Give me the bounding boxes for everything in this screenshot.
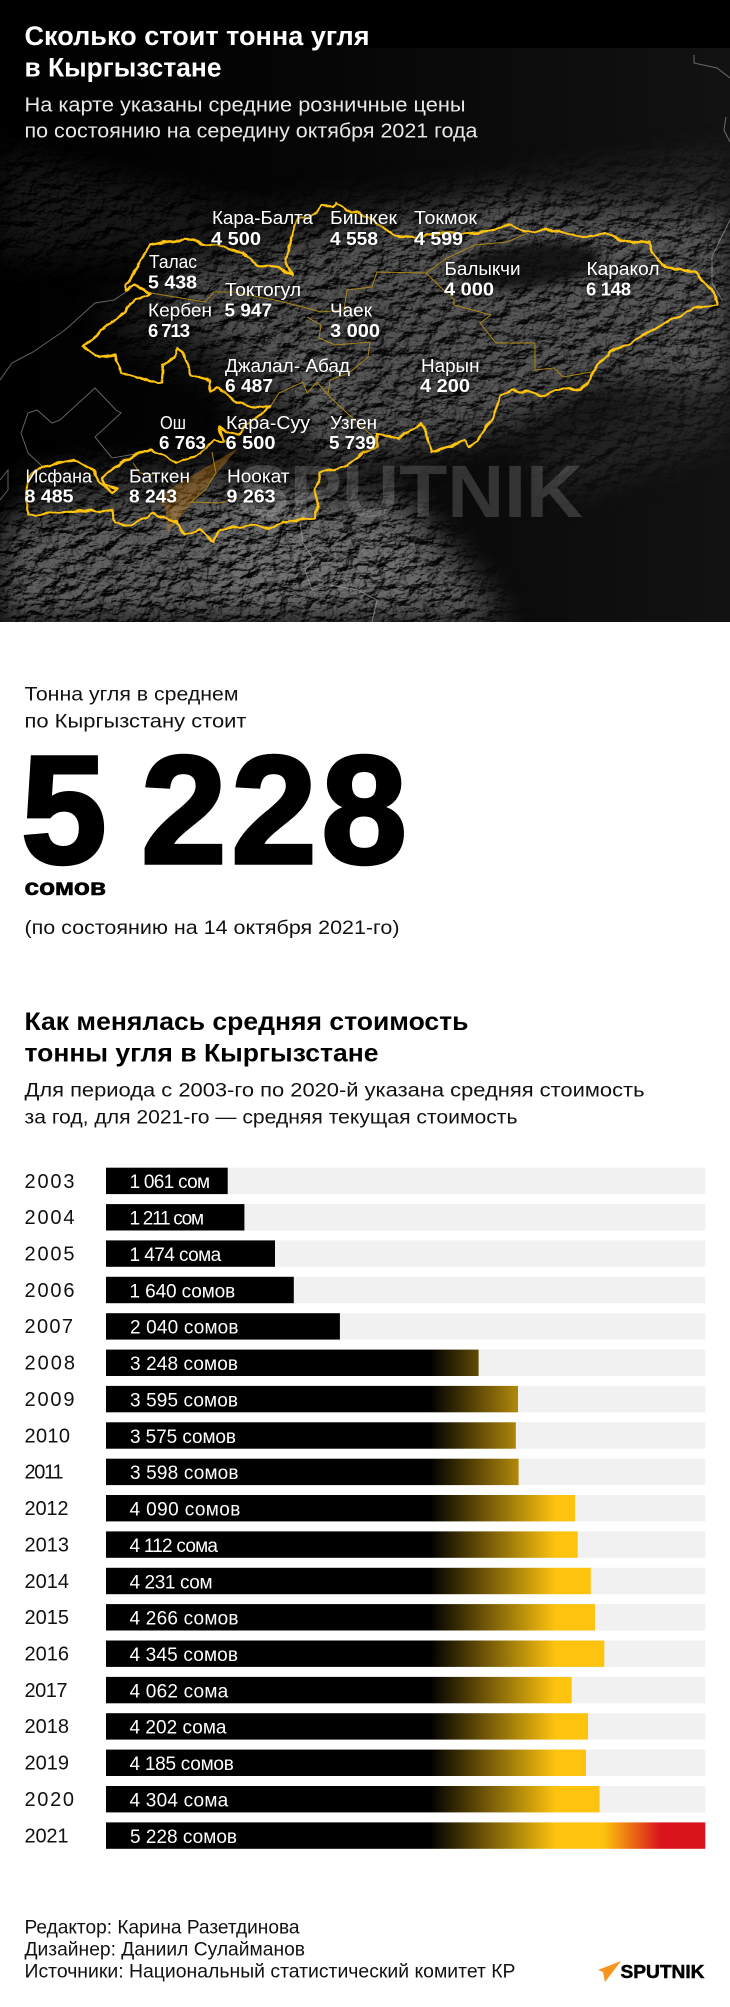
row 2010 [24,1422,705,1449]
row 2020: 2020 [24,1789,74,1811]
row 2005: 2005 [24,1243,74,1265]
label: Каракол: 6 148 [586,278,631,300]
row 2006: 2006 [24,1280,74,1302]
row 2007: 2 040 сомов [130,1318,238,1339]
label: Нарын: Нарын [421,355,480,376]
chart description: Для периода с 2003-го по 2020-й указана средняя стоимость [24,1080,644,1102]
label: Кара-Балта: 4 500 [211,228,261,249]
chart description [24,1080,644,1128]
label: Узген: 5 739 [329,432,376,453]
row 2016 [24,1640,705,1667]
label: Кербен: 6 713 [148,320,190,341]
text: national average intro: по Кыргызстану стоит [24,710,247,732]
label: Кара-Балта [211,207,314,249]
watermark: Sputnik orange logo [155,448,238,532]
bar chart: coal price by year [24,1168,705,1849]
label: Балыкчи: 4 000 [444,278,494,300]
row 2003: 2003 [24,1171,74,1193]
row 2019 [24,1750,705,1776]
row 2020: 4 304 сома [130,1790,229,1812]
label: Кара-Суу [226,412,311,453]
row 2009 [24,1386,705,1412]
label: Бишкек: 4 558 [330,228,378,249]
label: Джалал-Абад: Джалал- Абад [225,355,350,376]
row 2012: 4 090 сомов [130,1500,240,1520]
label: Токтогул [224,279,301,320]
label: Узген [329,412,377,453]
label: Бишкек [330,207,398,249]
row 2016: 4 345 сомов [130,1645,238,1666]
row 2014 [24,1568,705,1594]
subtitle: по состоянию на середину октября 2021 года [24,120,478,142]
label: Джалал-Абад: 6 487 [225,375,273,396]
watermark: SPUTNIK wordmark: SPUTNIK [237,450,583,533]
row 2011: 3 598 сомов [130,1463,238,1484]
row 2012: 2012 [24,1498,68,1520]
row 2015: 4 266 сомов [130,1609,238,1630]
credits: Дизайнер: Даниил Сулайманов [24,1938,305,1960]
row 2004 [24,1204,705,1230]
label: Талас: 5 438 [148,272,197,292]
subtitle [24,94,478,142]
label: Ноокат: Ноокат [227,466,290,486]
label: Ош: Ош [160,412,186,433]
label: Балыкчи: Балыкчи [444,258,520,279]
text: national average intro [24,684,247,732]
map labels: city prices [24,207,660,506]
row 2014: 4 231 сом [130,1572,212,1593]
label: Нарын: 4 200 [420,375,470,396]
credits: Источники: Национальный статистический комитет КР [24,1960,516,1982]
row 2004: 1 211 сом [130,1209,204,1230]
row 2010: 2010 [24,1425,70,1447]
label: Талас [148,251,197,292]
row 2011 [24,1459,705,1485]
label: Кара-Балта: Кара-Балта [212,207,314,228]
row 2017: 2017 [24,1680,68,1702]
oblast borders [133,233,591,503]
row 2015 [24,1604,705,1630]
title: в Кыргызстане [24,52,222,82]
label: Токмок: 4 599 [414,228,463,249]
row 2019: 4 185 сомов [130,1754,234,1775]
label: Токтогул: Токтогул [225,279,301,300]
row 2014: 2014 [24,1571,69,1593]
label: Чаек: Чаек [330,300,373,320]
row 2008: 2008 [24,1353,75,1375]
row 2020 [24,1786,705,1812]
row 2007: 2007 [24,1316,73,1338]
label: Чаек [330,300,380,341]
logo: Sputnik: SPUTNIK [620,1962,704,1982]
credits [24,1916,516,1982]
label: Чаек: 3 000 [330,320,380,341]
row 2010: 3 575 сомов [130,1427,236,1448]
chart heading [24,1008,468,1068]
label: Баткен: 8 243 [129,486,177,506]
label: Исфана [24,466,93,506]
row 2008: 3 248 сомов [130,1354,238,1375]
row 2012 [24,1495,705,1521]
row 2021 [24,1822,705,1849]
row 2006 [24,1277,705,1303]
row 2005 [24,1240,705,1267]
label: Исфана: Исфана [26,466,93,486]
credits: Редактор: Карина Разетдинова [24,1916,300,1938]
panel: relief map [0,0,730,622]
text: national average intro: Тонна угля в среднем [24,684,238,706]
row 2018: 2018 [24,1716,69,1738]
row 2003: 1 061 сом [130,1172,210,1193]
row 2009: 2009 [24,1389,74,1411]
label: Джалал-Абад [225,355,350,396]
row 2021: 5 228 сомов [130,1827,237,1848]
title [24,21,370,82]
row 2019: 2019 [24,1753,69,1775]
label: Ноокат [226,466,290,506]
label: Бишкек: Бишкек [330,207,398,228]
label: Кара-Суу: 6 500 [226,432,276,453]
label: Узген: Узген [330,412,377,433]
big number: 5 228: 5 [21,724,158,896]
row 2009: 3 595 сомов [130,1390,238,1411]
label: Исфана: 8 485 [24,486,74,506]
title: Сколько стоит тонна угля [24,21,370,51]
row 2005: 1 474 сома [130,1245,222,1266]
label: Нарын [420,355,480,396]
row 2021: 2021 [24,1825,68,1847]
row 2011: 2011 [24,1462,64,1484]
chart heading: Как менялась средняя стоимость [24,1008,468,1036]
chart description: за год, для 2021-го — средняя текущая стоимость [24,1106,518,1128]
label: Токмок: Токмок [414,207,478,228]
label: Токтогул: 5 947 [224,300,272,320]
Kyrgyzstan outline [26,202,717,542]
row 2013: 4 112 сома [130,1536,218,1557]
row 2007 [24,1313,705,1340]
row 2003 [24,1168,705,1194]
label: Каракол: Каракол [586,258,660,279]
label: Ош [159,412,206,453]
row 2013: 2013 [24,1534,69,1556]
row 2017 [24,1677,705,1703]
label: Кара-Суу: Кара-Суу [226,412,311,433]
text: date note: (по состоянию на 14 октября 2021-го) [24,917,400,939]
label: Баткен: Баткен [129,466,190,486]
row 2018: 4 202 сома [130,1718,227,1739]
row 2013 [24,1531,705,1558]
row 2008 [24,1350,705,1376]
label: Ноокат: 9 263 [226,486,276,506]
row 2004: 2004 [24,1207,74,1229]
row 2006: 1 640 сомов [130,1281,235,1302]
row 2017: 4 062 сома [130,1681,229,1702]
label: Баткен [129,466,190,506]
row 2016: 2016 [24,1644,69,1666]
label: Каракол [586,258,660,300]
text: сомов: сомов [24,874,106,900]
chart heading: тонны угля в Кыргызстане [24,1040,379,1068]
label: Токмок [414,207,478,249]
label: Кербен [148,300,212,341]
row 2018 [24,1713,705,1740]
label: Кербен: Кербен [148,300,212,320]
label: Балыкчи [444,258,520,300]
big number: 5 228: 228 [141,724,411,896]
subtitle: На карте указаны средние розничные цены [24,94,466,116]
label: Ош: 6 763 [159,432,206,453]
label: Талас: Талас [149,251,197,272]
row 2015: 2015 [24,1607,69,1629]
neighbouring country borders [0,55,730,622]
